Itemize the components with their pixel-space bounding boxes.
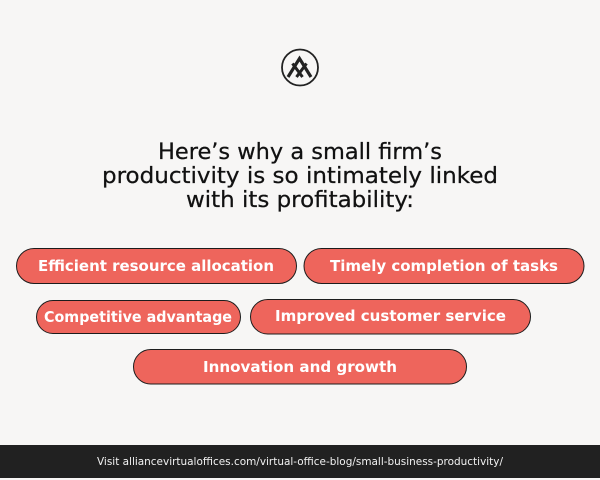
pill: competitive advantage: Competitive advantage	[44, 308, 232, 326]
title	[102, 139, 498, 213]
pill: timely completion of tasks: Timely completion of tasks	[330, 257, 558, 275]
title: with its profitability:	[186, 187, 414, 213]
pill: efficient resource allocation	[16, 248, 296, 284]
pill: innovation and growth: Innovation and growth	[203, 358, 397, 376]
footer bar: Visit alliancevirtualoffices.com/virtual-office-blog/small-business-productivity/	[97, 455, 503, 468]
pill: competitive advantage	[36, 300, 240, 334]
pill: improved customer service	[250, 300, 530, 334]
icon: company logo	[282, 50, 318, 86]
pill: innovation and growth	[134, 350, 466, 384]
footer bar	[0, 445, 600, 478]
pill: timely completion of tasks	[304, 248, 584, 284]
pill: efficient resource allocation: Efficient resource allocation	[38, 257, 274, 275]
pill: improved customer service: Improved customer service	[275, 307, 506, 325]
title: Here’s why a small firm’s	[158, 139, 442, 165]
title: productivity is so intimately linked	[102, 163, 498, 189]
